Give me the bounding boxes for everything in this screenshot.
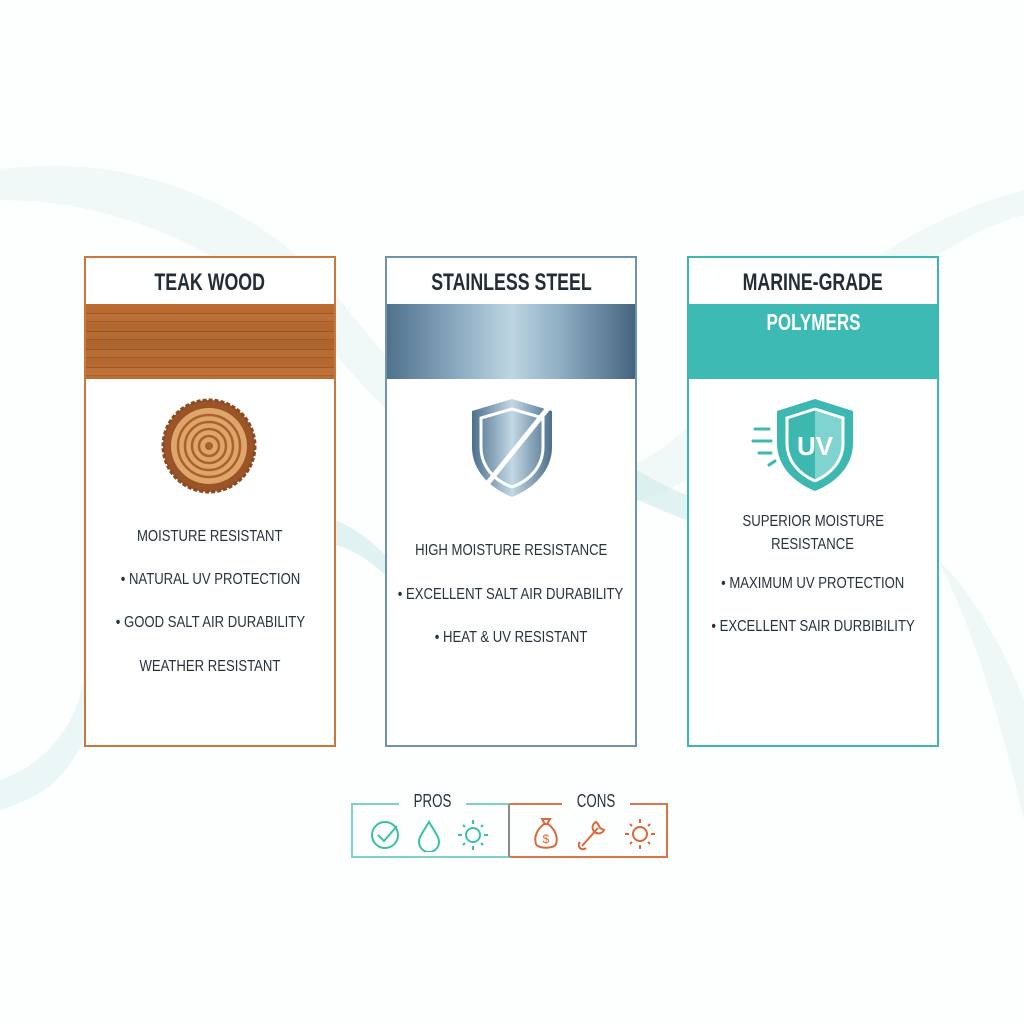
legend: pros and cons: CONS — [577, 791, 615, 811]
panel: stainless steel: • EXCELLENT SALT AIR DURABILITY — [398, 586, 624, 603]
text: steel properties: HIGH MOISTURE RESISTANCE — [415, 542, 607, 559]
panel: teak wood: • GOOD SALT AIR DURABILITY — [115, 614, 305, 631]
panel: teak wood: WEATHER RESISTANT — [140, 658, 280, 675]
text: teak properties: MOISTURE RESISTANT — [137, 528, 283, 545]
panel: marine-grade polymers: • MAXIMUM UV PROTECTION — [721, 575, 905, 592]
legend: pros and cons — [351, 791, 668, 858]
panel: marine-grade polymers: • EXCELLENT SAIR DURBIBILITY — [711, 618, 915, 635]
panel: stainless steel: • HEAT & UV RESISTANT — [435, 629, 587, 646]
icon: UV shield: UV — [797, 431, 834, 461]
panel: stainless steel — [385, 256, 637, 747]
panel: marine-grade polymers: RESISTANCE — [772, 536, 854, 553]
icon: UV shield — [752, 399, 853, 491]
panel: teak wood: • NATURAL UV PROTECTION — [120, 571, 300, 588]
wood texture band — [86, 304, 334, 379]
text: polymer properties: SUPERIOR MOISTURE — [742, 513, 884, 530]
heading: teak wood: TEAK WOOD — [155, 269, 265, 296]
icons: cons — [534, 818, 655, 850]
legend: cons — [510, 803, 668, 858]
heading: stainless steel: STAINLESS STEEL — [431, 269, 591, 296]
teal band with polymers: POLYMERS — [766, 309, 860, 335]
legend: pros — [351, 803, 510, 858]
panel: marine-grade polymers — [687, 256, 939, 747]
icons: pros — [371, 820, 488, 852]
icon: tree ring — [162, 398, 256, 494]
steel gradient band — [387, 304, 635, 379]
heading: marine-grade: MARINE-GRADE — [743, 269, 883, 296]
icon: shield — [472, 399, 552, 497]
legend: pros and cons: PROS — [414, 791, 451, 811]
teal band with polymers — [689, 304, 937, 379]
icons: cons: $ — [543, 832, 550, 846]
panel: teak wood — [84, 256, 336, 747]
